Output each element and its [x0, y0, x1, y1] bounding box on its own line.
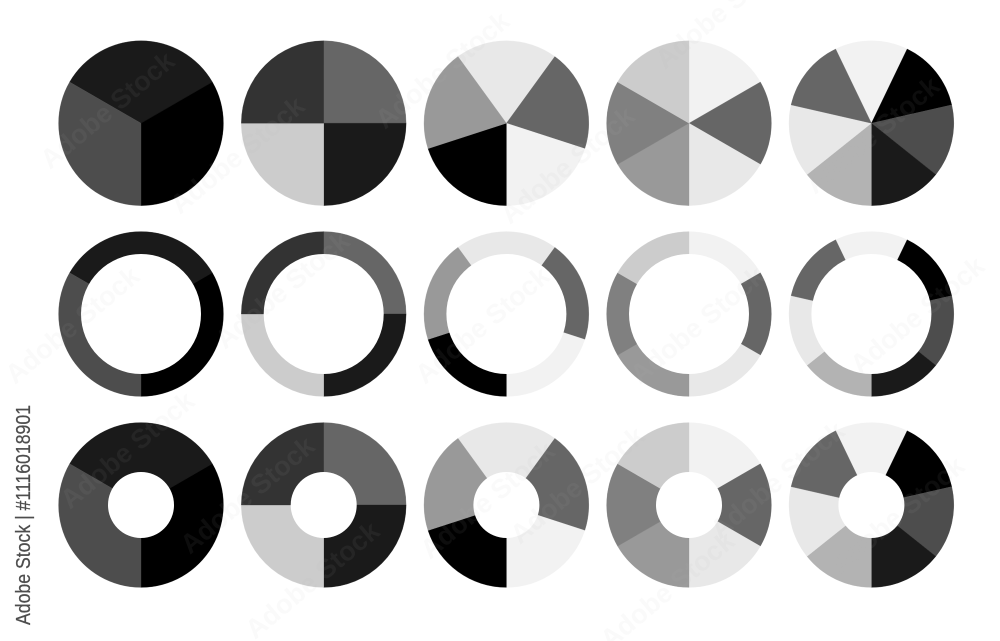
- watermark text: Adobe Stock: [165, 90, 311, 220]
- pie chart: 6 segments: [607, 41, 771, 206]
- ring chart: 3 segments: [59, 232, 223, 396]
- ring chart: 6 segments: [607, 232, 771, 396]
- row 3: donut charts: [59, 423, 954, 587]
- watermark text: Adobe Stock: [35, 45, 181, 175]
- watermark text: Adobe Stock: [505, 420, 651, 550]
- donut chart: 7 segments: [789, 423, 954, 587]
- donut chart: 4 segments: [241, 423, 406, 587]
- row 2: thin ring charts: [59, 232, 954, 396]
- donut chart: 6 segments: [607, 423, 771, 587]
- pie chart: 7 segments: [789, 41, 954, 206]
- ring chart: 4 segments: [241, 232, 406, 396]
- ring chart: 5 segments: [424, 232, 589, 396]
- watermark text: Adobe Stock: [415, 435, 561, 565]
- watermark text: Adobe Stock: [495, 100, 641, 230]
- watermark text: Adobe Stock: [175, 430, 321, 560]
- watermark text: Adobe Stock: [240, 515, 386, 641]
- donut chart: 3 segments: [59, 423, 223, 587]
- pie chart: 5 segments: [424, 41, 589, 206]
- watermark text: Adobe Stock: [210, 225, 356, 355]
- donut chart: 5 segments: [424, 423, 589, 587]
- watermark text: Adobe Stock: [625, 260, 771, 390]
- watermark text: Adobe Stock: [845, 250, 991, 380]
- watermark text: Adobe Stock: [370, 5, 516, 135]
- side credit text: Adobe Stock | #1116018901: [13, 405, 35, 625]
- watermark text: Adobe Stock: [410, 260, 556, 390]
- pie chart: 4 segments: [241, 41, 406, 206]
- pie chart: 3 segments: [59, 41, 223, 206]
- row 1: pie charts: [59, 41, 954, 206]
- ring chart: 7 segments: [789, 232, 954, 396]
- watermark text: Adobe Stock: [0, 260, 146, 390]
- watermark text: Adobe Stock: [825, 450, 971, 580]
- watermark text: Adobe Stock: [55, 385, 201, 515]
- watermark text: Adobe Stock: [705, 415, 851, 545]
- watermark text: Adobe Stock: [800, 70, 946, 200]
